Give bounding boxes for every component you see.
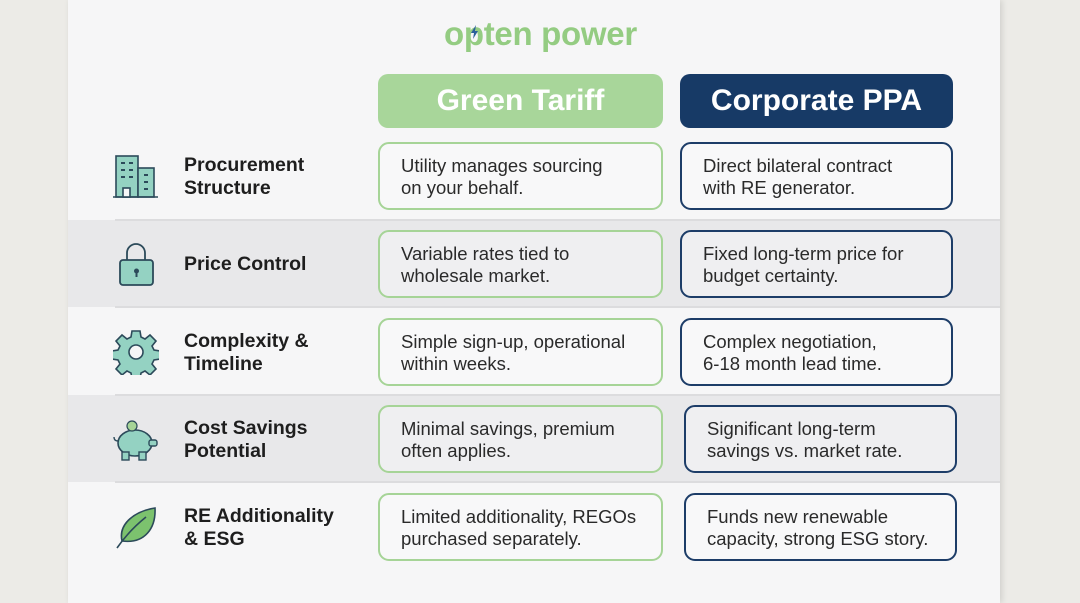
icon: leaf: [116, 507, 156, 548]
icon: gear: [113, 330, 159, 375]
text: Simple sign-up, operational: [401, 331, 625, 352]
label: Price Control: Price Control: [184, 253, 306, 275]
text: Variable rates tied to: [401, 243, 569, 264]
header: Corporate PPA: Corporate PPA: [711, 84, 922, 117]
label: Procurement Structure: [184, 154, 304, 199]
logo: opten power: [444, 15, 637, 52]
header: Green Tariff: [378, 74, 663, 128]
header: Green Tariff: Green Tariff: [437, 84, 604, 117]
text: capacity, strong ESG story.: [707, 528, 928, 548]
label: RE Additionality & ESG: [184, 505, 334, 550]
label: RE Additionality & ESG: & ESG: [184, 528, 245, 550]
text: Complex negotiation,: [703, 331, 877, 352]
corporate PPA cells: with RE generator.: [703, 176, 855, 198]
text: Fixed long-term price for: [703, 243, 903, 264]
icon: lock: [119, 243, 154, 286]
text: Funds new renewable: [707, 506, 888, 527]
text: wholesale market.: [401, 264, 550, 286]
corporate PPA cells: [680, 142, 953, 210]
icon: building: [113, 155, 158, 198]
text: Limited additionality, REGOs: [401, 506, 636, 527]
label: Complexity & Timeline: [184, 330, 309, 375]
header: Corporate PPA: [680, 74, 953, 128]
text: budget certainty.: [703, 264, 838, 286]
label: Cost Savings Potential: [184, 417, 308, 462]
label: Procurement Structure: Procurement: [184, 154, 304, 176]
icon: piggy bank: [113, 420, 158, 461]
text: within weeks.: [401, 352, 511, 374]
text: 6-18 month lead time.: [703, 352, 882, 374]
text: purchased separately.: [401, 528, 582, 548]
text: Minimal savings, premium: [401, 418, 615, 439]
corporate PPA cells: Direct bilateral contract: [703, 155, 892, 176]
text: often applies.: [401, 440, 511, 460]
green tariff cells: Utility manages sourcing: [401, 155, 603, 176]
label: Procurement Structure: Structure: [184, 177, 271, 199]
text: savings vs. market rate.: [707, 440, 902, 460]
label: Complexity & Timeline: Timeline: [184, 353, 263, 375]
green tariff cells: on your behalf.: [401, 176, 523, 198]
label: Complexity & Timeline: Complexity &: [184, 330, 309, 352]
text: Significant long-term: [707, 418, 876, 439]
green tariff cells: [378, 142, 663, 210]
label: RE Additionality & ESG: RE Additionality: [184, 505, 334, 527]
label: Cost Savings Potential: Potential: [184, 440, 266, 462]
label: Cost Savings Potential: Cost Savings: [184, 417, 308, 439]
